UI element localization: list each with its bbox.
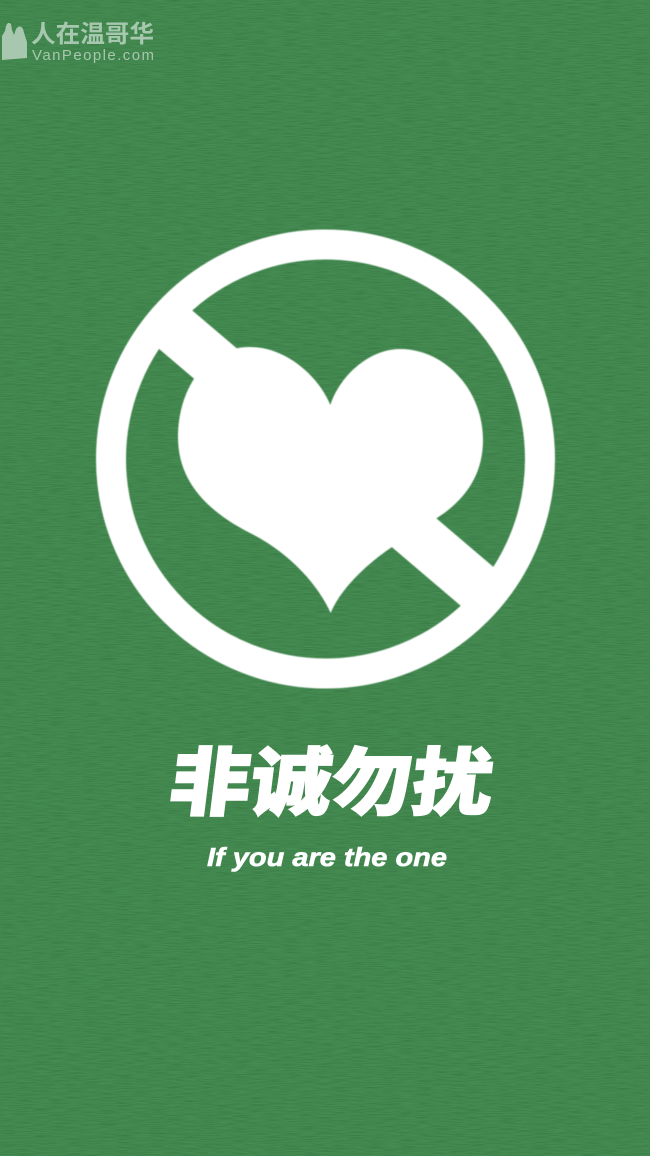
watermark Chinese name: 人在温哥华	[31, 21, 154, 48]
diagonal bar	[158, 306, 497, 606]
icon: no-love prohibition sign	[111, 244, 540, 674]
title: 非诚勿扰	[165, 742, 498, 825]
watermark logo	[2, 21, 154, 64]
watermark site name: VanPeople.com	[32, 47, 154, 64]
subtitle: If you are the one	[207, 842, 447, 872]
prohibition ring	[111, 244, 540, 674]
icon: two people silhouette	[2, 23, 27, 60]
heart	[178, 347, 483, 613]
